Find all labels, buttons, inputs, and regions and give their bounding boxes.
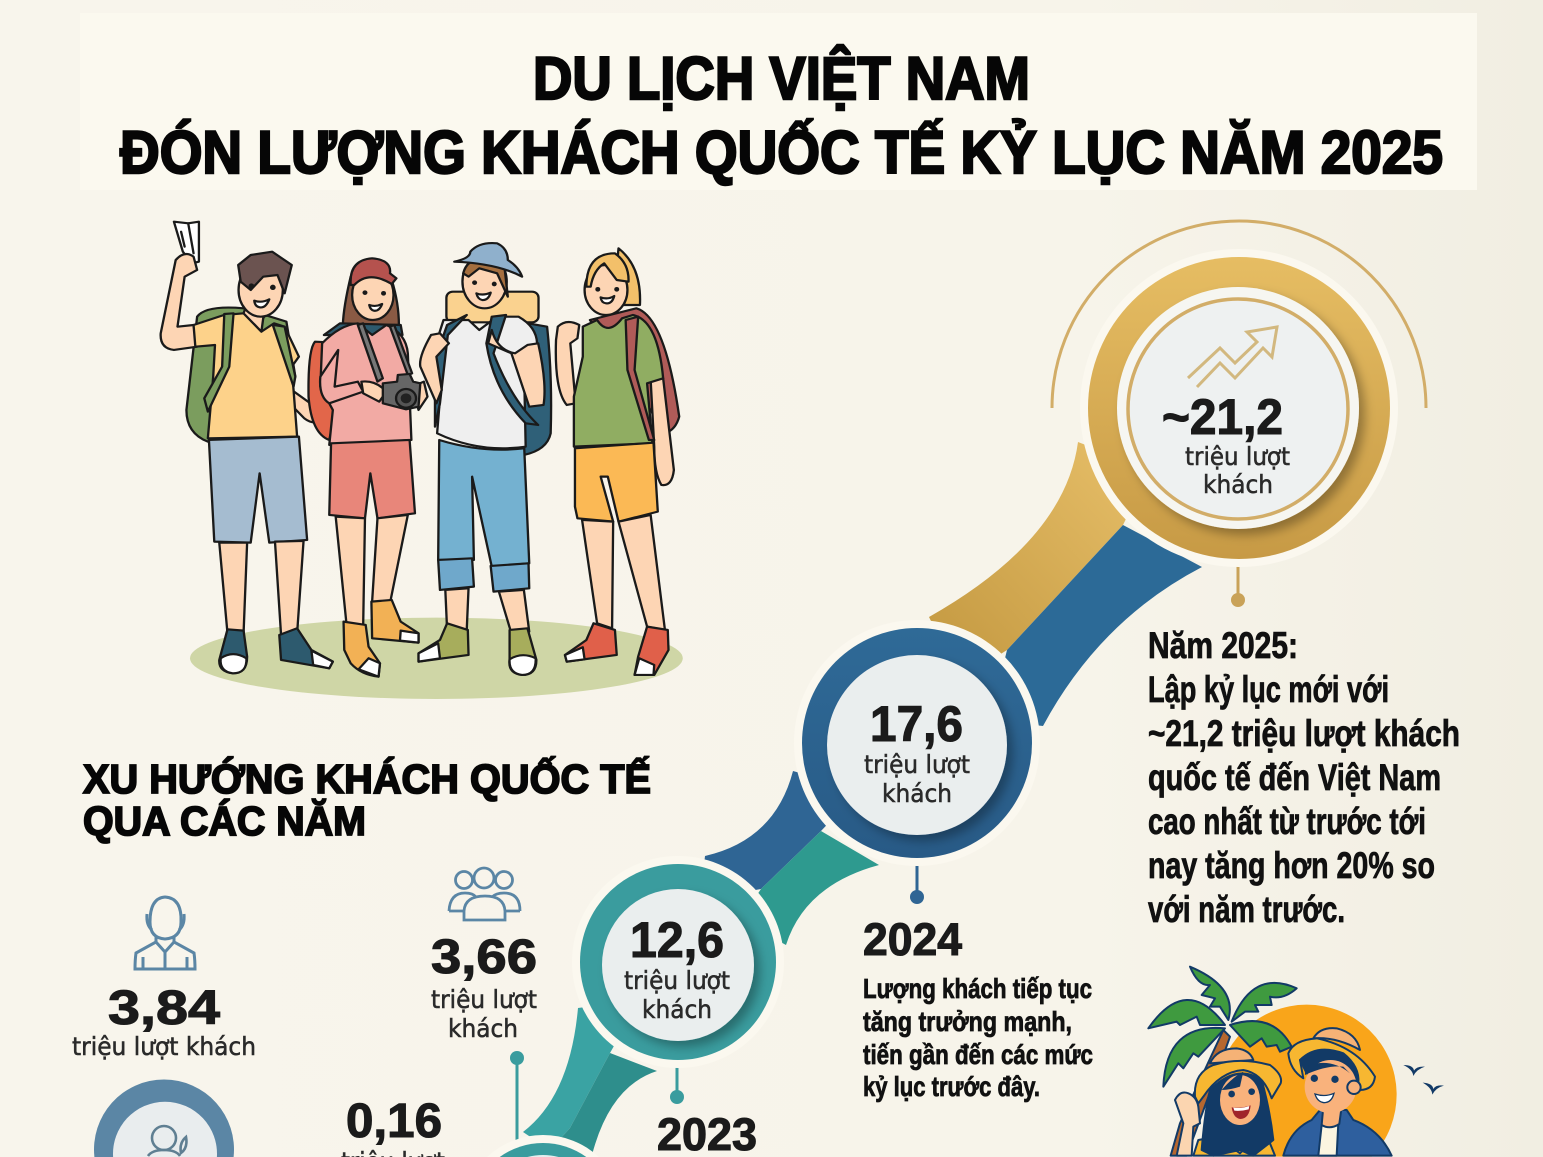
band 2024 to 2025 bbox=[929, 442, 1202, 726]
node 2023: teal circle bbox=[572, 856, 784, 1068]
node 2024: blue circle bbox=[794, 620, 1040, 866]
description 2024: kỷ lục trước đây. bbox=[863, 1071, 1040, 1102]
band 2022 to 2023 bbox=[523, 1000, 657, 1155]
description 2024: Lượng khách tiếp tục bbox=[863, 973, 1092, 1004]
description 2024: tăng trưởng mạnh, bbox=[863, 1006, 1072, 1037]
year 2024 with description bbox=[863, 914, 1093, 1102]
connector stems and dots bbox=[510, 555, 1245, 1150]
stat: 3,84 million visitors bbox=[72, 897, 256, 1061]
title line 2: ĐÓN LƯỢNG KHÁCH QUỐC TẾ KỶ LỤC NĂM 2025 bbox=[120, 119, 1443, 186]
title line 1: DU LỊCH VIỆT NAM bbox=[533, 45, 1030, 112]
icon: person bbox=[135, 897, 195, 969]
band 2023 to 2024 bbox=[700, 771, 879, 945]
heading: trend by year bbox=[83, 756, 651, 844]
node 2024: blue circle: triệu lượt bbox=[864, 750, 970, 779]
birds bbox=[1403, 1065, 1444, 1095]
2025 summary text: nay tăng hơn 20% so bbox=[1148, 845, 1435, 886]
heading: trend by year: QUA CÁC NĂM bbox=[83, 798, 366, 844]
2025 summary text: cao nhất từ trước tới bbox=[1148, 801, 1426, 842]
2025 summary text: với năm trước. bbox=[1148, 889, 1345, 930]
stat: 3,84 million visitors: triệu lượt khách bbox=[72, 1032, 256, 1061]
description 2024: tiến gần đến các mức bbox=[863, 1039, 1093, 1070]
node 2023: teal circle: 12,6 bbox=[630, 912, 724, 968]
icon: group of people bbox=[449, 868, 520, 920]
stat: 3,66 million visitors: khách bbox=[448, 1014, 518, 1043]
traveller 2: woman with camera bbox=[308, 258, 427, 677]
traveller 4: woman with green shirt bbox=[556, 248, 679, 675]
2025 summary text: quốc tế đến Việt Nam bbox=[1148, 757, 1441, 798]
stat: 0,16 million visitors: 0,16 bbox=[346, 1095, 442, 1148]
node 2025: gold circle: khách bbox=[1203, 470, 1273, 499]
icon: person with feather bbox=[148, 1126, 186, 1156]
2025 summary text: Năm 2025: bbox=[1148, 625, 1298, 666]
2025 summary text bbox=[1148, 625, 1460, 930]
illustration: couple with palm and sun bbox=[1148, 967, 1444, 1157]
node 2023: teal circle: khách bbox=[642, 995, 712, 1024]
icon: rising arrow bbox=[1188, 327, 1277, 387]
description 2024 bbox=[863, 973, 1093, 1102]
sun bbox=[1217, 1005, 1397, 1157]
palm tree bbox=[1148, 967, 1297, 1156]
node 2022: teal circle (cropped at page edge) bbox=[487, 1135, 599, 1157]
node 2025: gold circle bbox=[1052, 221, 1426, 567]
node 2025: gold circle: triệu lượt bbox=[1185, 442, 1290, 471]
timeline connector bands bbox=[523, 442, 1202, 1155]
man bbox=[1283, 1028, 1392, 1156]
heading: trend by year: XU HƯỚNG KHÁCH QUỐC TẾ bbox=[83, 756, 651, 802]
2025 summary text: Lập kỷ lục mới với bbox=[1148, 669, 1389, 710]
traveller 3: man with bucket hat bbox=[419, 243, 551, 675]
stat: 3,66 million visitors bbox=[431, 868, 537, 1043]
stat: 3,84 million visitors: 3,84 bbox=[108, 982, 220, 1035]
2025 summary text: ~21,2 triệu lượt khách bbox=[1148, 713, 1460, 754]
node 2024: blue circle: 17,6 bbox=[870, 696, 963, 752]
node 2023: teal circle: triệu lượt bbox=[624, 966, 730, 995]
thin outer arc bbox=[1052, 221, 1426, 408]
node 2024: blue circle: khách bbox=[882, 779, 952, 808]
ground ellipse bbox=[190, 618, 683, 699]
stat: 3,66 million visitors: triệu lượt bbox=[431, 985, 537, 1014]
woman bbox=[1175, 1048, 1281, 1156]
title panel bbox=[80, 13, 1477, 190]
stat: 3,66 million visitors: 3,66 bbox=[431, 931, 537, 984]
value: ~21,2 bbox=[1162, 389, 1283, 445]
traveller 1: man with ticket bbox=[161, 222, 333, 673]
illustration: group of four backpackers bbox=[161, 222, 683, 699]
year 2024 with description: 2024 bbox=[863, 914, 962, 965]
node: blue-grey circle with icon (cropped at page edge) bbox=[94, 1080, 234, 1157]
